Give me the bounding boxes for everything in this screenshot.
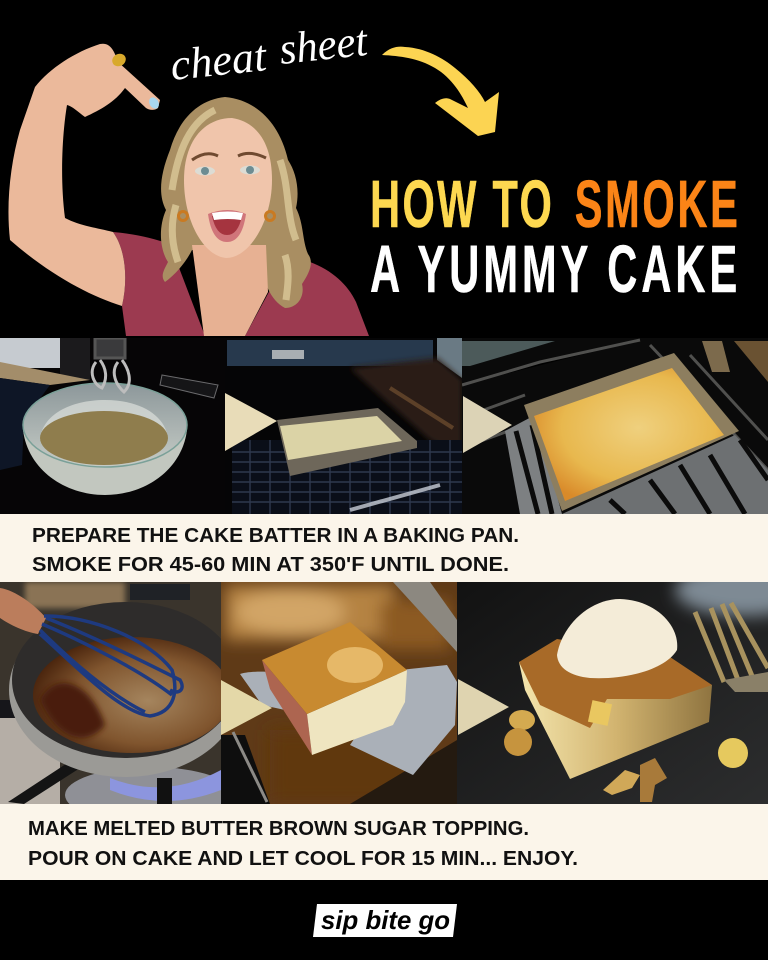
caramelized apple pieces [504,700,748,802]
grill bars [462,340,768,470]
ice cream scoop [557,599,677,678]
photo: cake batter in glass bowl [0,338,219,495]
hair [161,97,311,308]
whisk wires [40,616,182,716]
title line 1: SMOKE [575,167,738,241]
bowl [23,383,187,495]
earring left [178,212,188,220]
handwritten label: cheat sheet: cheat [168,31,270,90]
instruction band 1: SMOKE FOR 45-60 MIN AT 350'F UNTIL DONE. [32,553,509,576]
wire grate [232,440,462,514]
face [184,118,272,258]
fingernail [149,97,159,109]
baked cake [534,368,724,501]
mixer beaters [92,338,129,392]
photo: slice of cake on spatula [221,582,457,804]
title line 2: A YUMMY CAKE [370,232,737,306]
photo: plated cake with ice cream [457,564,768,804]
fork [695,603,768,692]
photo: pan on smoker grill [225,338,462,514]
open mouth [208,210,246,242]
title [370,167,738,306]
instruction band 2 [0,804,768,880]
icon: curved yellow arrow [382,47,499,136]
instruction band 1: PREPARE THE CAKE BATTER IN A BAKING PAN. [32,524,519,547]
baking pan [524,353,739,511]
baking pan with batter [277,408,417,476]
earring right [266,212,274,220]
foil under grate [505,415,768,514]
dress [113,232,369,336]
instruction band 2: MAKE MELTED BUTTER BROWN SUGAR TOPPING. [28,817,529,840]
eyes and brows [192,153,266,176]
gas burner [8,764,221,804]
title line 1 [370,167,738,241]
title line 1: HOW TO [370,167,552,241]
play arrow 1 [225,393,277,451]
logo: sip bite go: sip bite go [321,905,450,935]
cake slice [262,622,407,755]
handwritten label: cheat sheet [168,16,371,90]
photo: baked cake on grill [462,338,768,514]
cake slice on plate [519,639,712,779]
whisk handle [0,588,46,634]
header photo: woman pointing down [8,44,369,336]
ring [112,54,126,66]
hair highlights [172,110,296,300]
spatula [240,665,457,775]
play arrow 4 [458,679,509,735]
play arrow 2 [463,396,512,453]
brown sugar mixture [33,637,231,753]
arm and pointing hand [8,44,160,306]
instruction band 1 [0,514,768,582]
skillet [9,662,221,777]
play arrow 3 [221,680,272,735]
photo: whisking brown sugar topping [0,582,221,804]
handwritten label: cheat sheet: sheet [277,16,371,74]
blurred cake background [225,585,450,804]
chest and neck [192,245,268,336]
instruction band 2: POUR ON CAKE AND LET COOL FOR 15 MIN... ENJOY. [28,847,578,870]
